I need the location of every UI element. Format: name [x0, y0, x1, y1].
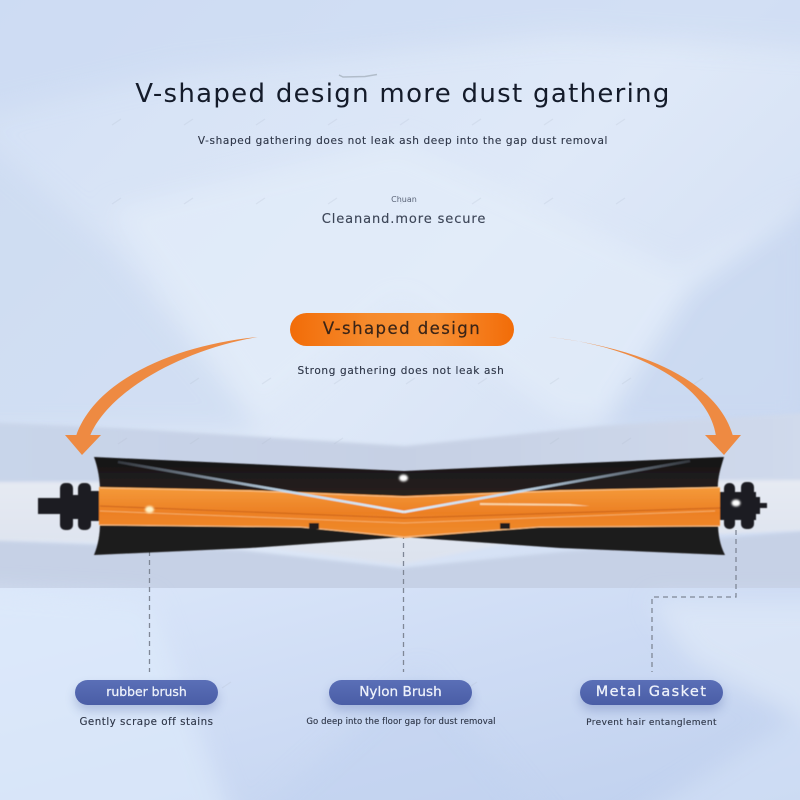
orange core	[99, 487, 720, 538]
label: metal gasket: Metal Gasket	[596, 684, 707, 700]
badge: V-shaped design: V-shaped design	[323, 319, 481, 338]
label: rubber brush	[75, 680, 218, 705]
dashed leader: metal gasket	[652, 530, 736, 672]
right curved arrow	[548, 337, 741, 455]
label: rubber brush: rubber brush	[106, 684, 187, 699]
tagline: Cleanand.more secure	[322, 212, 486, 227]
label: nylon brush: Nylon Brush	[359, 684, 442, 700]
label: nylon brush	[329, 680, 472, 705]
left end cap	[38, 483, 100, 530]
lower black bristles	[94, 522, 725, 555]
badge: V-shaped design	[290, 313, 514, 346]
caption under badge: Strong gathering does not leak ash	[298, 365, 504, 377]
dashed leader: rubber brush	[148, 524, 150, 672]
label: metal gasket	[580, 680, 723, 705]
upper black bristles	[94, 457, 724, 505]
left curved arrow	[65, 337, 258, 455]
caption: rubber brush: Gently scrape off stains	[79, 716, 214, 728]
caption: nylon brush: Go deep into the floor gap for dust removal	[306, 717, 496, 727]
decorative smudge above title	[338, 74, 377, 78]
V-shaped light strip	[118, 462, 404, 512]
callout dots	[145, 474, 740, 513]
title: V-shaped design more dust gathering	[135, 79, 671, 109]
core ribs	[100, 506, 720, 518]
roller brush	[38, 457, 767, 555]
small label: Chuan: Chuan	[391, 195, 417, 204]
caption: metal gasket: Prevent hair entanglement	[586, 718, 717, 728]
core notches	[309, 523, 319, 529]
dashed leader: nylon brush	[402, 480, 404, 672]
right end cap	[718, 482, 767, 529]
subtitle: V-shaped gathering does not leak ash deep into the gap dust removal	[198, 135, 608, 147]
